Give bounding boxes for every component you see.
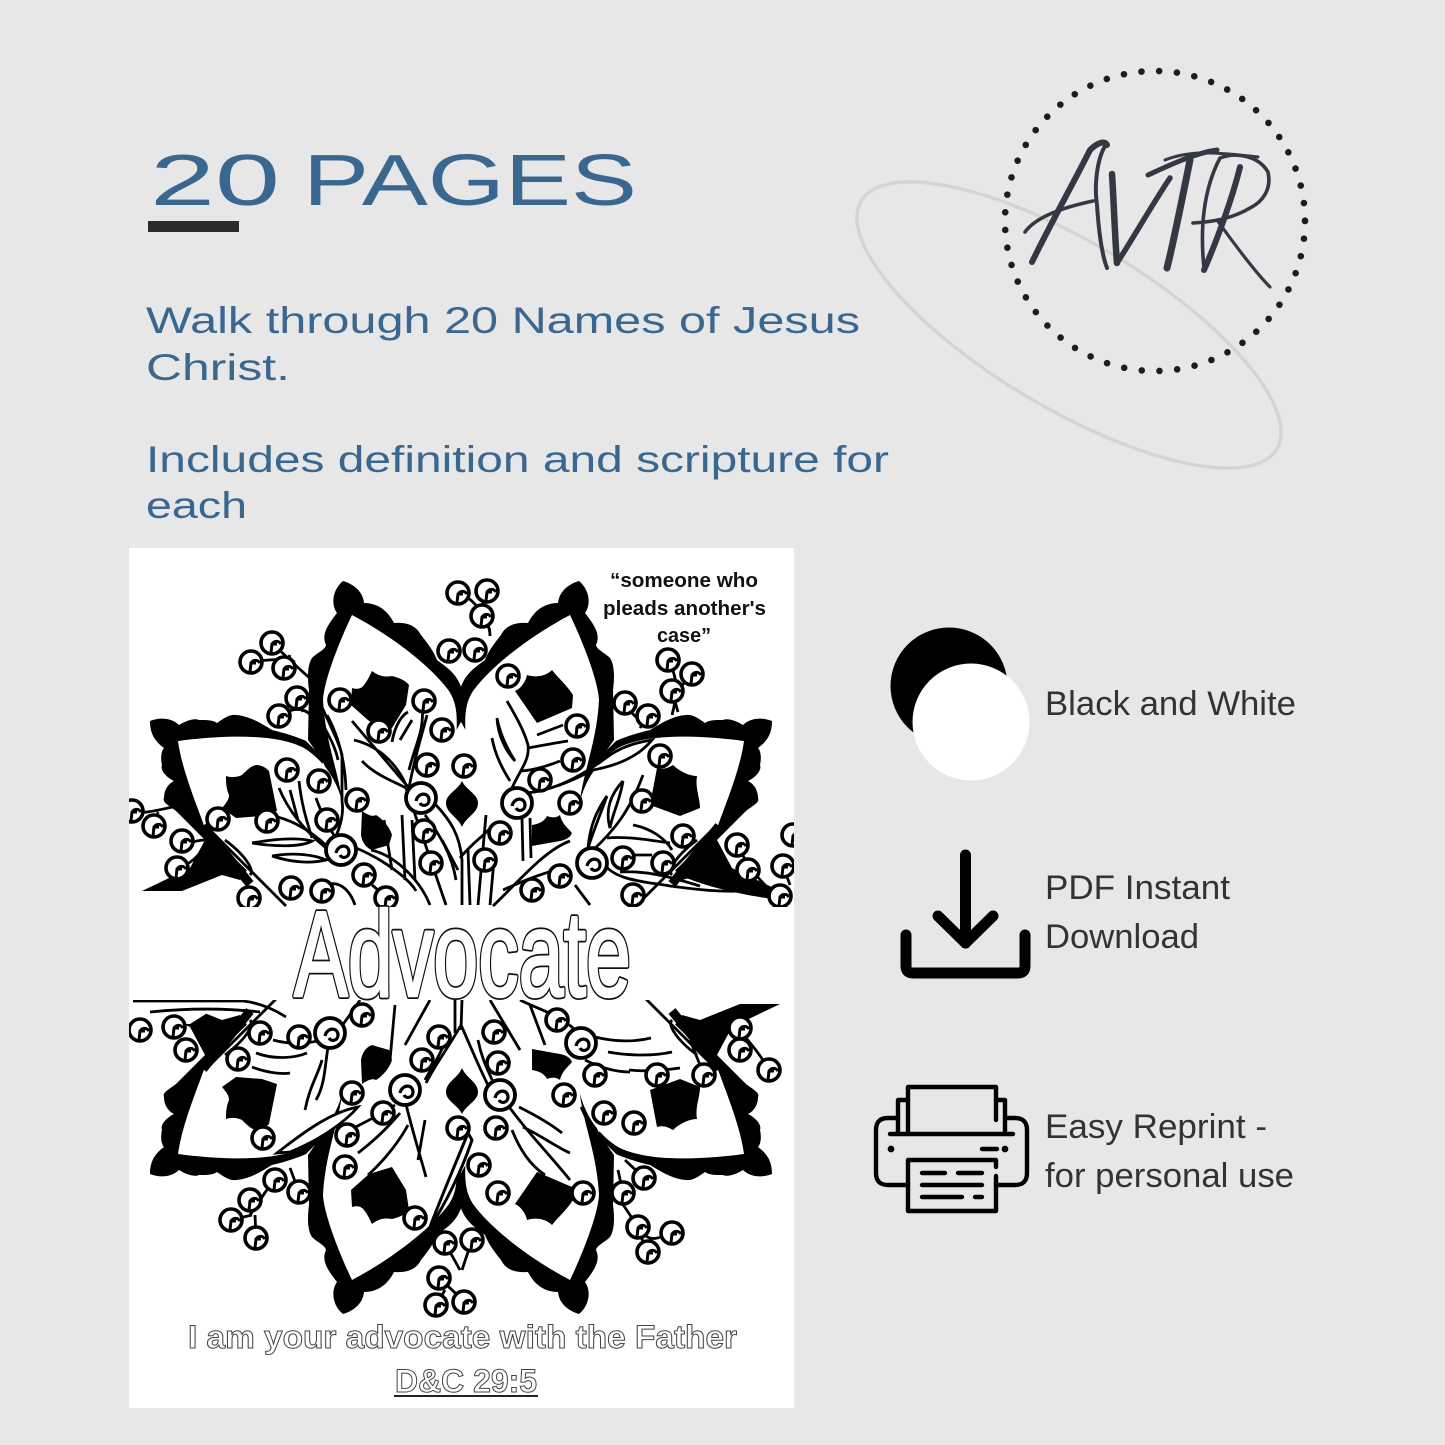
page title: Advocate: Advocate	[294, 886, 631, 1022]
mandala: upper half	[121, 580, 804, 912]
page title: Advocate	[294, 886, 631, 1022]
description text: Christ.	[146, 347, 290, 388]
label: black and white: Black and White	[1045, 685, 1296, 723]
heading: 20 PAGES	[150, 141, 637, 221]
icon: black and white circles	[890, 628, 1030, 780]
icon: printer	[876, 1087, 1027, 1211]
label: easy reprint	[1045, 1108, 1294, 1195]
panel: coloring page preview	[121, 548, 804, 1408]
logo: AVTR in dotted ring	[1005, 71, 1305, 371]
label: PDF instant download: PDF Instant	[1045, 869, 1231, 907]
scripture line: I am your advocate with the Father	[188, 1319, 737, 1355]
quote: definition: “someone who	[610, 570, 758, 592]
label: PDF instant download	[1045, 869, 1231, 956]
label: PDF instant download: Download	[1045, 918, 1199, 956]
heading: 20 PAGES: PAGES	[303, 141, 637, 221]
mandala: lower half	[129, 983, 780, 1316]
heading underline bar	[148, 221, 239, 232]
description text: each	[146, 485, 247, 526]
page title: Advocate: Advocate	[294, 886, 631, 1022]
description text	[146, 300, 889, 526]
quote: definition: case”	[657, 625, 711, 647]
heading: 20 PAGES: 20	[150, 141, 280, 221]
infographic canvas	[129, 68, 1308, 1408]
icon: download arrow	[906, 855, 1025, 973]
decorative tilted ellipse	[819, 130, 1319, 520]
scripture reference: D&C 29:5	[395, 1363, 537, 1399]
label: easy reprint: Easy Reprint -	[1045, 1108, 1267, 1146]
quote: definition: pleads another's	[603, 598, 766, 620]
description text: Includes definition and scripture for	[146, 439, 889, 480]
label: easy reprint: for personal use	[1045, 1157, 1294, 1195]
quote: definition	[603, 570, 766, 647]
description text: Walk through 20 Names of Jesus	[146, 300, 860, 341]
